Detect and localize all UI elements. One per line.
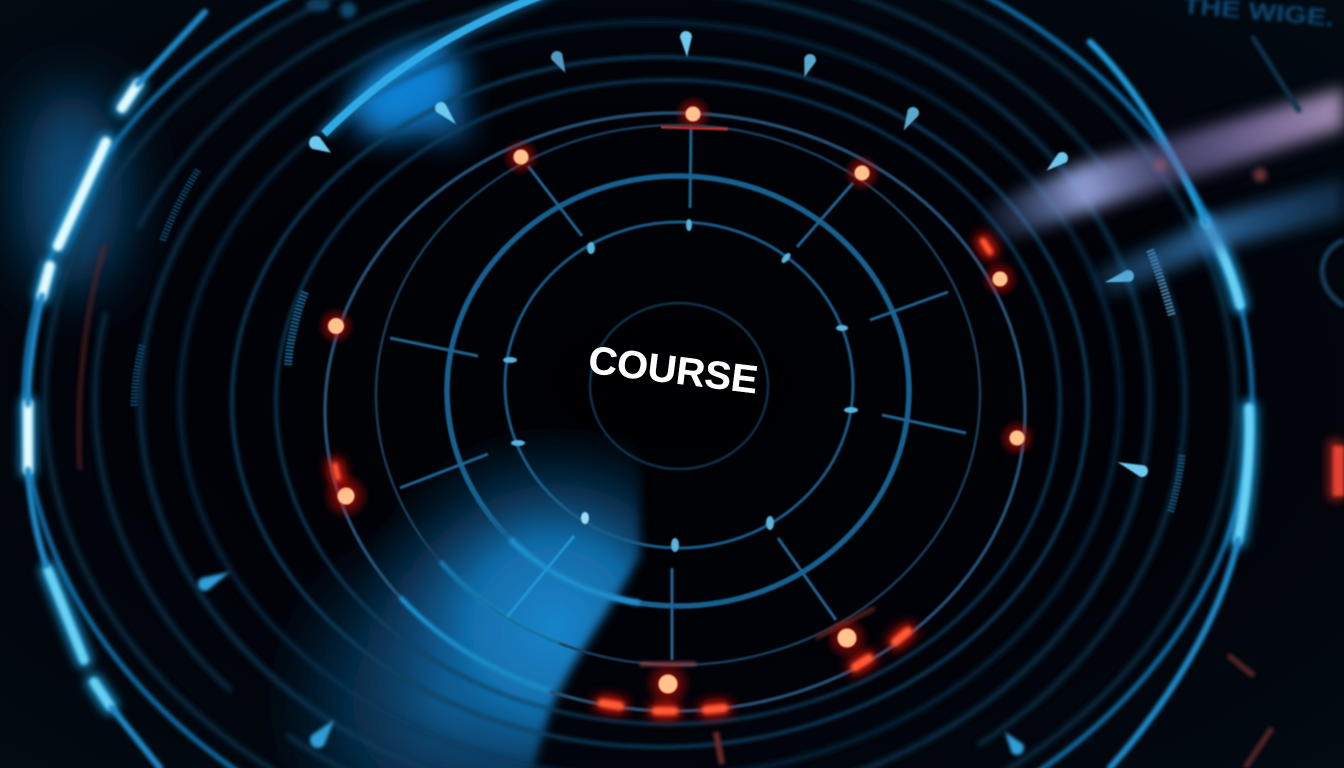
red dashes	[335, 241, 990, 711]
striped arc segments	[134, 170, 1182, 513]
spokes	[390, 126, 966, 660]
thick ring highlight	[510, 539, 640, 603]
top arc highlight	[324, 0, 545, 134]
main ring with red dots	[325, 113, 1025, 711]
centre label: COURSE: COURSE	[586, 339, 760, 402]
blue pin markers	[306, 31, 1150, 479]
blue light sweep: bottom	[278, 432, 647, 768]
blue glow: left edge	[22, 90, 122, 290]
right edge red light	[1328, 440, 1344, 500]
thin ring	[505, 222, 853, 548]
blurred top-right line	[1252, 36, 1300, 112]
ring highlights inside blue glow	[400, 561, 560, 691]
dim red accents	[79, 245, 1272, 768]
secondary ring	[376, 125, 980, 665]
purple light streaks	[985, 88, 1344, 296]
centre ring	[590, 303, 768, 469]
small ring nodes	[503, 219, 858, 552]
right edge arc	[1322, 240, 1344, 306]
red tick at top	[661, 127, 728, 129]
blurred spots at top edge	[306, 0, 356, 18]
thick ring	[447, 176, 909, 606]
red glowing lights	[317, 95, 1036, 711]
blue light sweep: top	[337, 29, 479, 155]
